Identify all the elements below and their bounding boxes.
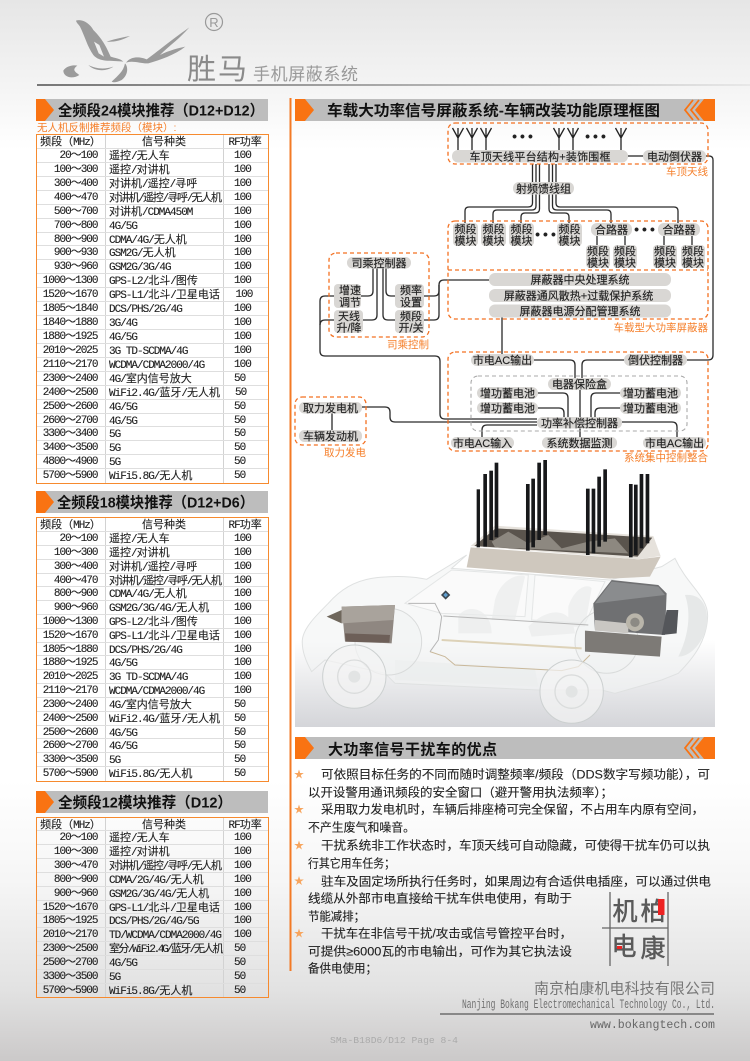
table: 24-module bands: 100 <box>234 192 251 204</box>
panel: integrated system control: 功率补偿控制器 <box>541 416 618 430</box>
table: 24-module bands: 900～930 <box>54 247 98 259</box>
table: 12-module bands: TD/WCDMA/CDMA2000/4G <box>109 930 221 942</box>
table: 24-module bands: WCDMA/CDMA2000/4G <box>109 360 204 372</box>
table: 12-module bands: 100 <box>234 929 251 941</box>
text block: advantages list: ★ <box>294 841 304 852</box>
panel: jammer modules and combiners: 频段 <box>558 222 580 236</box>
feed line group: 射频馈线组 <box>516 182 571 196</box>
company name and website: 南京柏康机电科技有限公司 <box>534 980 715 998</box>
table: 24-module bands: 1880～1925 <box>43 331 98 343</box>
table: 18-module bands: 2600～2700 <box>43 740 98 752</box>
table: 24-module bands: 100 <box>234 220 251 232</box>
panel: driver control: 设置 <box>400 296 422 309</box>
panel: jammer modules and combiners: 频段 <box>682 244 704 258</box>
table: 18-module bands: WiFi2.4G/蓝牙/无人机 <box>109 713 220 726</box>
page footer code: SMa-B18D6/D12 Page 8-4 <box>330 1035 458 1046</box>
company seal logo: 康 <box>640 935 666 963</box>
table: 18-module bands: 100 <box>234 561 251 573</box>
table: 18-module bands: WCDMA/CDMA2000/4G <box>109 686 204 698</box>
table: 18-module bands: 100 <box>234 630 251 642</box>
panel: integrated system control: 增功蓄电池 <box>623 401 678 415</box>
table: 18-module bands: 4G/室内信号放大 <box>109 699 192 712</box>
panel: power take-off generator <box>295 397 366 459</box>
heading: 24-module recommendation: 全频段24模块推荐（D12+D12） <box>58 102 264 120</box>
panel: power take-off generator: 取力发电 <box>324 446 366 459</box>
table: 24-module bands: 50 <box>234 415 245 427</box>
text block: advantages list: ★ <box>294 805 304 816</box>
table: 24-module bands: 100 <box>234 303 251 315</box>
rear wheels <box>355 608 422 675</box>
table: 12-module bands: 100 <box>234 902 251 914</box>
table: 24-module bands: 频段（MHz） <box>40 136 101 149</box>
table: 18-module bands: 50 <box>234 754 245 766</box>
table: 18-module bands: 100 <box>234 685 251 697</box>
table: 12-module bands: 信号种类 <box>142 818 186 830</box>
panel: roof antenna <box>448 123 708 178</box>
text block: advantages list: 驻车及固定场所执行任务时，如果周边有合适供电插座，可以通过供电 <box>321 874 711 888</box>
illustration: transparent vehicle with roof antennas <box>295 460 715 727</box>
table: 24-module bands: 4G/5G <box>109 402 137 414</box>
table: 24-module bands: GSM2G/3G/4G <box>109 262 171 274</box>
panel: roof antenna: ••• <box>585 128 609 144</box>
heading: 12-module recommendation <box>36 791 268 813</box>
panel: driver control: 升/降 <box>336 320 362 334</box>
table: 24-module bands: 1520～1670 <box>43 289 98 301</box>
panel: integrated system control: 市电AC输出 <box>645 436 704 450</box>
table: 18-module bands: 100 <box>234 602 251 614</box>
table: 24-module bands: 对讲机/遥控/寻呼 <box>109 178 197 191</box>
table: 24-module bands: 50 <box>234 373 245 385</box>
table: 24-module bands: RF功率 <box>228 136 262 149</box>
table: 18-module bands: 100 <box>234 644 251 656</box>
jammer system bars: 屏蔽器通风散热+过载保护系统 <box>504 288 653 302</box>
table: 12-module bands: 100～300 <box>54 846 98 858</box>
heading: advantages of high-power jammer <box>295 737 715 759</box>
table: 12-module bands: 2500～2700 <box>43 957 98 969</box>
table: 24-module bands: 100 <box>234 150 251 162</box>
table: 24-module bands: 4G/5G <box>109 416 137 428</box>
panel: power take-off generator: 取力发电机 <box>303 401 358 415</box>
table: 24-module bands: 100 <box>236 289 252 301</box>
column divider line <box>290 98 292 971</box>
company name and website <box>440 980 715 1032</box>
panel: jammer modules and combiners: ••• <box>535 226 559 242</box>
panel: jammer modules and combiners: 频段 <box>510 222 532 236</box>
table: 18-module bands: 2010～2025 <box>43 671 98 683</box>
table: 18-module bands: 4G/5G <box>109 741 137 753</box>
panel: jammer modules and combiners: 合路器 <box>662 222 696 236</box>
table: 18-module bands: 4G/5G <box>109 728 137 740</box>
table: 12-module bands: 1520～1670 <box>43 902 98 914</box>
table: 12-module bands: 5G <box>109 972 120 984</box>
text block: advantages list: 干扰车在非信号干扰/攻击或信号管控平台时， <box>321 926 572 940</box>
panel: jammer modules and combiners: 频段 <box>482 222 504 236</box>
table: 24-module bands: 700～800 <box>54 220 98 232</box>
panel: driver control: 开/关 <box>398 320 424 334</box>
table: 18-module bands: 100 <box>234 671 251 683</box>
company name and website: www.bokangtech.com <box>590 1018 715 1032</box>
table: 12-module bands: RF功率 <box>228 818 262 832</box>
heading: vehicle modification block diagram <box>295 99 715 121</box>
text block: advantages list: 行其它用车任务； <box>308 856 395 870</box>
table: 24-module bands: GSM2G/无人机 <box>109 247 176 260</box>
company seal logo: 电 <box>611 933 637 961</box>
table: 12-module bands: WiFi5.8G/无人机 <box>109 985 192 998</box>
table: 18-module bands: WiFi5.8G/无人机 <box>109 768 192 781</box>
text block: advantages list: 备供电使用； <box>308 960 377 976</box>
brand logo: horse, name and registered mark: R <box>209 15 219 30</box>
heading: 18-module recommendation: 全频段18模块推荐（D12+D6） <box>57 494 254 512</box>
table: 24-module bands: 100 <box>234 247 251 259</box>
table: 18-module bands: 800～900 <box>54 588 98 600</box>
heading: vehicle modification block diagram: 车载大功率信号屏蔽系统-车辆改装功能原理框图 <box>327 102 660 120</box>
table: 18-module bands: 2300～2400 <box>43 699 98 711</box>
panel: integrated system control: 市电AC输入 <box>453 436 512 450</box>
table: 24-module bands: 50 <box>235 387 246 399</box>
note: anti-drone recommended bands: 无人机反制推荐频段（模块）: <box>37 121 176 134</box>
jammer system bars: 屏蔽器电源分配管理系统 <box>520 304 640 318</box>
panel: roof antenna: 电动倒伏器 <box>647 150 702 164</box>
panel: roof antenna: 车顶天线 <box>666 165 708 178</box>
table: 12-module bands: 对讲机/遥控/寻呼/无人机 <box>109 860 221 873</box>
table: 18-module bands: 遥控/对讲机 <box>109 547 170 560</box>
table: 12-module bands: 4G/5G <box>109 958 137 970</box>
table: 24-module bands: 100 <box>234 206 251 218</box>
table: 18-module bands: 50 <box>234 768 245 780</box>
table: 18-module bands: 100 <box>234 547 251 559</box>
panel: integrated system control: 增功蓄电池 <box>480 401 535 415</box>
panel: integrated system control: 增功蓄电池 <box>623 386 678 400</box>
panel: driver control: 司乘控制器 <box>352 256 406 270</box>
table: 18-module bands: CDMA/4G/无人机 <box>109 588 187 601</box>
panel: jammer modules and combiners: 模块 <box>510 234 532 248</box>
table: 18-module bands: 2400～2500 <box>43 713 98 725</box>
table: 12-module bands: 100 <box>234 888 251 900</box>
table: 24-module bands: 300～400 <box>54 178 98 190</box>
panel: integrated system control: 系统集中控制整合 <box>624 451 708 464</box>
table: 18-module bands: 100～300 <box>54 547 98 559</box>
table: 12-module bands: 遥控/无人车 <box>109 832 170 845</box>
jammer system bars <box>489 273 671 318</box>
panel: integrated system control: 倒伏控制器 <box>628 353 683 367</box>
table: 24-module bands: 4800～4900 <box>43 456 98 468</box>
table: 18-module bands: 50 <box>234 713 245 725</box>
panel: driver control: 增速 <box>339 283 361 297</box>
table: 18-module bands: 3G TD-SCDMA/4G <box>109 672 187 684</box>
table: 12-module bands: 2010～2170 <box>43 929 98 941</box>
table: 24-module bands: 2600～2700 <box>43 415 98 427</box>
table: 12-module bands: 室分/WiFi2.4G/蓝牙/无人机 <box>109 943 222 956</box>
table: 18-module bands: 100 <box>234 588 251 600</box>
table: 24-module bands: 930～960 <box>54 261 98 273</box>
table: 18-module bands: 信号种类 <box>142 519 186 531</box>
table: 24-module bands: 对讲机/CDMA450M <box>109 206 192 219</box>
table: 18-module bands: RF功率 <box>228 519 262 532</box>
table: 12-module bands: 3300～3500 <box>43 971 98 983</box>
panel: jammer modules and combiners: 频段 <box>454 222 476 236</box>
table: 18-module bands: 1520～1670 <box>43 630 98 642</box>
table: 24-module bands: 3G TD-SCDMA/4G <box>109 346 187 358</box>
table: 18-module bands: 2500～2600 <box>43 727 98 739</box>
table: 24-module bands: GPS-L1/北斗/卫星电话 <box>109 289 220 302</box>
panel: driver control: 司乘控制 <box>387 338 429 351</box>
table: 12-module bands: DCS/PHS/2G/4G/5G <box>109 916 199 928</box>
panel: jammer modules and combiners: 模块 <box>654 256 676 270</box>
table: 24-module bands: 100 <box>234 178 251 190</box>
table: 12-module bands: 100 <box>234 846 251 858</box>
table: 12-module bands: 频段（MHz） <box>40 818 101 832</box>
text block: advantages list: 线缆从外部市电直接给干扰车供电使用，有助于 <box>308 890 572 906</box>
table: 24-module bands: 2300～2400 <box>43 373 98 385</box>
table: 18-module bands: 1000～1300 <box>43 616 98 628</box>
panel: driver control <box>329 253 429 351</box>
table: 18-module bands: 100 <box>234 533 251 545</box>
table: 24-module bands: 对讲机/遥控/寻呼/无人机 <box>109 192 221 205</box>
panel: integrated system control <box>448 352 708 464</box>
heading: 12-module recommendation: 全频段12模块推荐（D12） <box>58 794 232 812</box>
table: 24-module bands: 100 <box>234 275 251 287</box>
panel: power take-off generator: 车辆发动机 <box>303 429 358 443</box>
panel: driver control: 调节 <box>339 296 361 309</box>
table: 24-module bands: 1805～1840 <box>43 303 98 315</box>
table: 24-module bands: 遥控/无人车 <box>109 150 170 163</box>
table: 18-module bands: 300～400 <box>54 561 98 573</box>
table: 18-module bands: 3300～3500 <box>43 754 98 766</box>
table: 18-module bands: GPS-L1/北斗/卫星电话 <box>109 630 220 643</box>
table: 24-module bands: 4G/5G <box>109 221 137 233</box>
table: 18-module bands: 50 <box>234 740 245 752</box>
panel: roof antenna: ••• <box>512 128 536 144</box>
table: 24-module bands: 3300～3400 <box>43 428 98 440</box>
wiring <box>430 652 590 671</box>
table: 18-module bands: 遥控/无人车 <box>109 533 170 546</box>
table: 24-module bands: 500～700 <box>54 206 98 218</box>
brand logo: horse, name and registered mark <box>37 14 750 86</box>
panel: jammer modules and combiners: ••• <box>634 221 658 237</box>
text block: advantages list: 干扰系统非工作状态时，车顶天线可自动隐藏，可使得干扰车仍可以执 <box>321 838 710 852</box>
table: 18-module bands: DCS/PHS/2G/4G <box>109 645 182 657</box>
panel: jammer modules and combiners: 频段 <box>614 244 636 258</box>
panel: jammer modules and combiners: 模块 <box>558 234 580 248</box>
table: 18-module bands <box>36 517 269 782</box>
engine <box>342 605 395 643</box>
table: 12-module bands: 900～960 <box>54 888 98 900</box>
panel: jammer modules and combiners: 模块 <box>482 234 504 248</box>
table: 24-module bands: 2010～2025 <box>43 345 98 357</box>
table: 24-module bands <box>36 134 269 484</box>
table: 12-module bands: 遥控/对讲机 <box>109 846 170 859</box>
diagram connecting lines <box>320 156 713 437</box>
panel: integrated system control: 增功蓄电池 <box>480 386 535 400</box>
table: 18-module bands: 20～100 <box>59 533 98 545</box>
text block: advantages list: ★ <box>294 929 304 940</box>
table: 24-module bands: 2400～2500 <box>43 387 98 399</box>
table: 12-module bands: 1805～1925 <box>43 915 98 927</box>
table: 24-module bands: DCS/PHS/2G/4G <box>109 304 182 316</box>
table: 18-module bands: 100 <box>234 657 251 669</box>
table: 24-module bands: GPS-L2/北斗/图传 <box>109 275 198 288</box>
text block: advantages list: 可依照目标任务的不同而随时调整频率/频段（DDS数字写频功能），可 <box>321 766 710 782</box>
panel: jammer modules and combiners: 合路器 <box>595 222 628 236</box>
table: 24-module bands: 400～470 <box>54 192 98 204</box>
table: 24-module bands: 100 <box>234 261 251 273</box>
table: 18-module bands: 对讲机/遥控/寻呼/无人机 <box>109 574 221 588</box>
table: 12-module bands: 2300～2500 <box>43 943 98 955</box>
heading: advantages of high-power jammer: 大功率信号干扰车的优点 <box>328 740 497 758</box>
table: 12-module bands: 100 <box>234 832 251 844</box>
table: 24-module bands: 信号种类 <box>142 136 186 148</box>
roof antennas <box>477 460 649 557</box>
table: 18-module bands: 5G <box>109 755 120 767</box>
table: 24-module bands: 100 <box>234 345 251 357</box>
table: 24-module bands: 100 <box>234 331 251 343</box>
table: 24-module bands: 1840～1880 <box>43 317 98 329</box>
table: 12-module bands: 50 <box>234 971 245 983</box>
table: 12-module bands: 100 <box>234 915 251 927</box>
table: 12-module bands: CDMA/2G/4G/无人机 <box>109 874 204 887</box>
table: 18-module bands: GSM2G/3G/4G/无人机 <box>109 602 209 615</box>
panel: integrated system control: 电器保险盒 <box>552 377 607 391</box>
jammer system bars: 屏蔽器中央处理系统 <box>530 274 630 286</box>
table: 12-module bands: GSM2G/3G/4G/无人机 <box>109 888 209 901</box>
table: 24-module bands: 100 <box>234 164 251 176</box>
table: 24-module bands: CDMA/4G/无人机 <box>109 234 187 247</box>
equipment box <box>585 631 662 657</box>
table: 24-module bands: WiFi5.8G/无人机 <box>109 470 192 483</box>
brand logo: horse, name and registered mark: 胜马 <box>187 54 247 86</box>
table: 18-module bands: 频段（MHz） <box>40 519 101 532</box>
table: 12-module bands: 300～470 <box>54 860 98 872</box>
table: 24-module bands: 4G/室内信号放大 <box>109 373 192 386</box>
table: 24-module bands: 20～100 <box>59 150 98 162</box>
table: 24-module bands: 5G <box>109 443 120 455</box>
panel: roof antenna: 车顶天线平台结构+装饰围框 <box>470 150 610 164</box>
table: 18-module bands: 900～960 <box>54 602 98 614</box>
table: 12-module bands: 800～900 <box>54 874 98 886</box>
table: 18-module bands: 100 <box>234 616 251 628</box>
table: 24-module bands: 100 <box>234 359 251 371</box>
company seal logo: 柏 <box>640 898 666 926</box>
heading: 18-module recommendation <box>36 491 268 513</box>
table: 12-module bands: 100 <box>234 874 251 886</box>
text block: advantages list: 不产生废气和噪音。 <box>308 820 415 834</box>
brand logo: horse, name and registered mark: 手机屏蔽系统 <box>253 65 358 84</box>
table: 24-module bands: 100 <box>234 234 251 246</box>
table: 18-module bands: 400～470 <box>54 574 98 586</box>
table: 18-module bands: 50 <box>234 727 245 739</box>
text block: advantages list: 以开设警用通讯频段的安全窗口（避开警用执法频率）； <box>308 784 613 800</box>
table: 24-module bands: 4G/5G <box>109 332 137 344</box>
text block: advantages list: ★ <box>294 876 304 888</box>
table: 24-module bands: 3400～3500 <box>43 442 98 454</box>
panel: driver control: 天线 <box>338 309 360 323</box>
panel: jammer modules and combiners: 频段 <box>654 244 676 258</box>
table: 24-module bands: 遥控/对讲机 <box>109 164 170 177</box>
company seal logo <box>602 892 668 966</box>
panel: jammer modules and combiners: 模块 <box>587 256 609 270</box>
table: 24-module bands: 50 <box>234 456 245 468</box>
table: 24-module bands: 5G <box>109 429 120 441</box>
table: 12-module bands: GPS-L1/北斗/卫星电话 <box>109 902 220 915</box>
company seal logo: 机 <box>612 898 638 926</box>
table: 12-module bands: 20～100 <box>59 832 98 844</box>
panel: jammer modules and combiners: 模块 <box>682 256 704 270</box>
panel: jammer modules and combiners: 频段 <box>587 244 609 258</box>
table: 18-module bands: 4G/5G <box>109 658 137 670</box>
table: 12-module bands: 50 <box>234 985 245 997</box>
table: 24-module bands: 50 <box>234 401 245 413</box>
table: 18-module bands: GPS-L2/北斗/图传 <box>109 616 198 629</box>
icon: antenna array <box>452 128 626 150</box>
table: 24-module bands: 5700～5900 <box>43 470 98 482</box>
table: 18-module bands: 50 <box>234 699 245 711</box>
table: 24-module bands: 100 <box>234 317 251 329</box>
table: 12-module bands <box>36 817 269 998</box>
table: 12-module bands: 5700～5900 <box>43 985 98 997</box>
table: 24-module bands: 100～300 <box>54 164 98 176</box>
text block: advantages list: 可提供≥6000瓦的市电输出，可作为其它执法设 <box>308 944 572 958</box>
table: 24-module bands: 800～900 <box>54 234 98 246</box>
panel: driver control: 频段 <box>400 309 422 323</box>
front wheels <box>323 645 386 708</box>
table: 24-module bands: 50 <box>234 442 245 454</box>
panel: jammer modules and combiners: 模块 <box>454 234 476 248</box>
panel: driver control: 频率 <box>400 283 422 297</box>
table: 24-module bands: 5G <box>109 457 120 469</box>
panel: jammer modules and combiners: 车载型大功率屏蔽器 <box>614 321 708 334</box>
table: 24-module bands: 1000～1300 <box>43 275 98 287</box>
panel: integrated system control: 市电AC输出 <box>473 353 532 367</box>
panel: jammer modules and combiners <box>448 221 708 334</box>
table: 12-module bands: 50 <box>234 943 245 955</box>
table: 24-module bands: 2500～2600 <box>43 401 98 413</box>
table: 24-module bands: 50 <box>234 428 245 440</box>
roof platform <box>467 547 661 579</box>
panel: integrated system control: 系统数据监测 <box>546 436 612 450</box>
table: 18-module bands: 100 <box>234 574 251 586</box>
table: 24-module bands: 3G/4G <box>109 318 137 330</box>
vehicle body <box>302 555 708 693</box>
table: 18-module bands: 对讲机/遥控/寻呼 <box>109 561 197 574</box>
heading: 24-module recommendation <box>36 99 268 121</box>
text block: advantages list: 节能减排； <box>308 910 365 924</box>
text block: advantages list: 采用取力发电机时，车辆后排座椅可完全保留，不占用车内原有空间， <box>321 802 704 816</box>
panel: jammer modules and combiners: 模块 <box>614 256 636 270</box>
table: 18-module bands: 2110～2170 <box>43 685 98 697</box>
table: 18-module bands: 5700～5900 <box>43 768 98 780</box>
text block: advantages list <box>294 766 711 976</box>
table: 24-module bands: 50 <box>234 470 245 482</box>
table: 18-module bands: 1805～1880 <box>43 644 98 656</box>
table: 24-module bands: WiFi2.4G/蓝牙/无人机 <box>109 387 220 400</box>
table: 24-module bands: 2110～2170 <box>43 359 98 371</box>
table: 18-module bands: 1880～1925 <box>43 657 98 669</box>
table: 12-module bands: 50 <box>234 957 245 969</box>
table: 12-module bands: 100 <box>234 860 251 872</box>
text block: advantages list: ★ <box>294 770 304 781</box>
